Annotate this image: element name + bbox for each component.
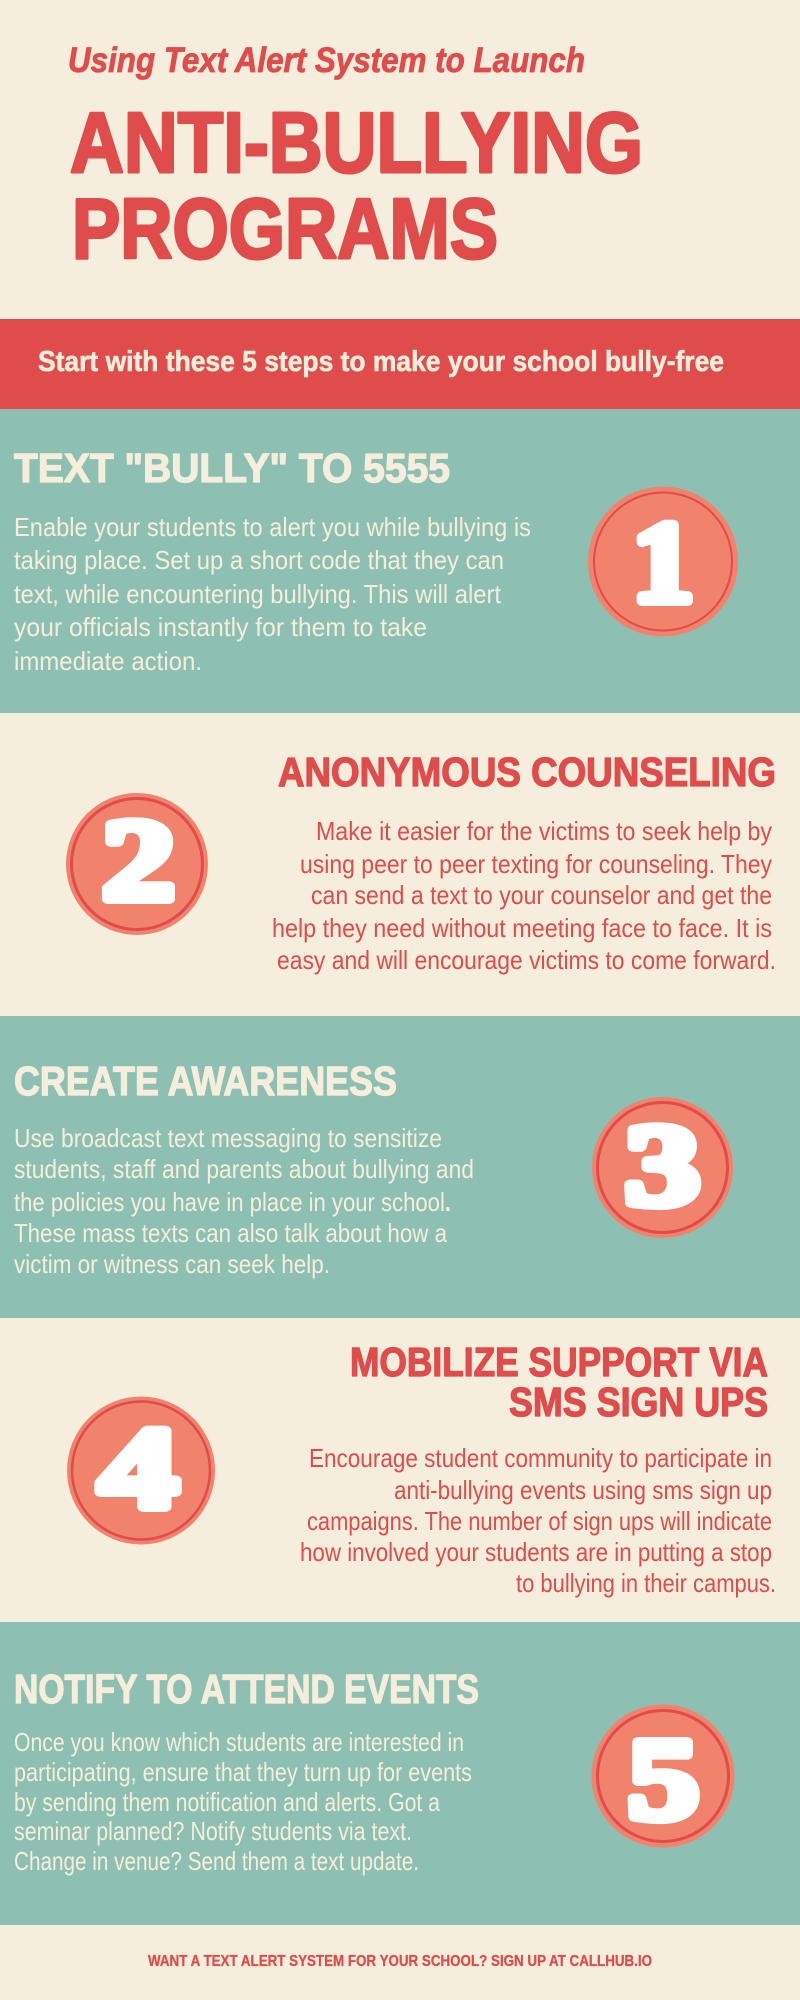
icon: number 2 badge: 2 bbox=[102, 797, 175, 925]
text: step 1 body: Enable your students to alert you while bullying is bbox=[14, 512, 531, 542]
text: step 3 body: students, staff and parents about bullying and bbox=[14, 1154, 474, 1184]
icon: number 1 badge: 1 bbox=[632, 499, 694, 627]
text: step 3 body: These mass texts can also talk about how a bbox=[14, 1218, 447, 1248]
text: step 1 body bbox=[14, 512, 531, 676]
text: step 1 body: your officials instantly for them to take bbox=[14, 612, 427, 642]
subtitle: Using Text Alert System to Launch bbox=[68, 41, 585, 80]
footer call to action: WANT A TEXT ALERT SYSTEM FOR YOUR SCHOOL? SIGN UP AT CALLHUB.IO bbox=[148, 1953, 652, 1970]
heading: step 4 bbox=[350, 1339, 768, 1425]
text: step 1 body: taking place. Set up a short code that they can bbox=[14, 545, 504, 575]
heading: step 3: CREATE AWARENESS bbox=[14, 1058, 397, 1104]
main title bbox=[70, 96, 643, 277]
text: step 5 body: Change in venue? Send them a text update. bbox=[14, 1846, 419, 1876]
banner: intro strip: Start with these 5 steps to make your school bully-free bbox=[38, 346, 724, 378]
icon: number 3 badge: 3 bbox=[625, 1102, 700, 1230]
heading: step 1: TEXT "BULLY" TO 5555 bbox=[14, 445, 450, 491]
text: step 4 body bbox=[300, 1443, 776, 1598]
text: step 5 body: participating, ensure that they turn up for events bbox=[14, 1757, 472, 1787]
panel: step 1 bbox=[0, 409, 800, 713]
text: step 2 body bbox=[272, 816, 776, 975]
icon: number 5 badge: 5 bbox=[628, 1716, 699, 1844]
text: step 5 body bbox=[14, 1727, 472, 1876]
icon: number 4 badge bbox=[67, 1396, 215, 1544]
text: step 5 body: by sending them notification and alerts. Got a bbox=[14, 1787, 440, 1817]
text: step 1 body: text, while encountering bullying. This will alert bbox=[14, 579, 502, 609]
icon: number 3 badge bbox=[592, 1097, 733, 1238]
icon: number 4 badge: 4 bbox=[99, 1405, 178, 1533]
panel: step 2 bbox=[0, 713, 800, 1016]
icon: number 1 badge bbox=[588, 486, 738, 636]
text: step 5 body: Once you know which students are interested in bbox=[14, 1727, 464, 1757]
text: step 3 body: victim or witness can seek help. bbox=[14, 1249, 330, 1279]
panel: step 3 bbox=[0, 1016, 800, 1319]
icon: number 5 badge bbox=[592, 1704, 734, 1848]
heading: step 5: NOTIFY TO ATTEND EVENTS bbox=[14, 1666, 479, 1712]
text: step 1 body: immediate action. bbox=[14, 646, 202, 676]
text: step 3 body: Use broadcast text messaging to sensitize bbox=[14, 1123, 442, 1153]
panel: step 5 bbox=[0, 1622, 800, 1925]
text: step 5 body: seminar planned? Notify students via text. bbox=[14, 1816, 412, 1846]
banner: intro strip bbox=[0, 319, 800, 409]
text: step 3 body bbox=[14, 1123, 474, 1279]
main title: ANTI-BULLYING bbox=[70, 96, 643, 191]
main title: PROGRAMS bbox=[72, 182, 498, 277]
text: step 3 body: the policies you have in place in your school. bbox=[14, 1187, 451, 1217]
header block bbox=[68, 41, 643, 277]
panel: step 4 bbox=[0, 1318, 800, 1622]
icon: number 2 badge bbox=[66, 793, 208, 935]
heading: step 4: SMS SIGN UPS bbox=[509, 1379, 768, 1425]
